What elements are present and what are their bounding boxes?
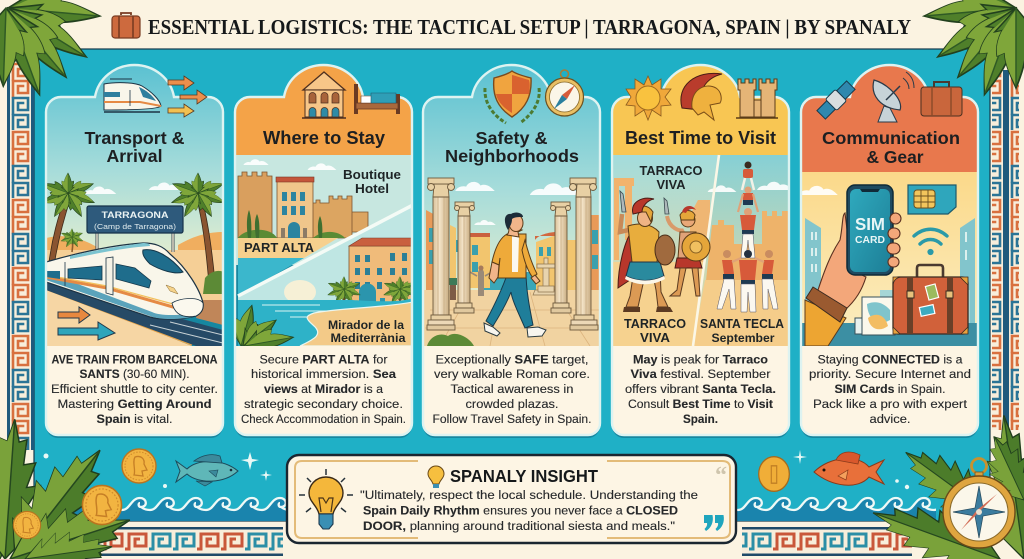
buildings left	[426, 210, 490, 290]
title text: ESSENTIAL LOGISTICS: THE TACTICAL SETUP | TARRAGONA, SPAIN | BY SPANALY	[148, 15, 911, 39]
text panel	[46, 346, 223, 436]
icon: coin right	[759, 457, 789, 491]
icon: coin corner	[13, 511, 41, 539]
bottom greek key border right	[742, 527, 912, 556]
body text: very walkable Roman core.	[434, 367, 590, 381]
label: tarraco viva bottom: VIVA	[640, 331, 670, 345]
palm leaves: bottom right corner	[860, 400, 1024, 559]
wave band right	[736, 495, 936, 521]
station sign: TARRAGONA	[102, 210, 169, 221]
text panel	[235, 346, 412, 436]
body text	[809, 352, 971, 426]
rail tracks	[46, 282, 223, 346]
wave band left	[66, 495, 288, 521]
body text: advice.	[870, 412, 910, 426]
left palm tree	[47, 172, 95, 261]
watch strap	[806, 287, 847, 322]
icon: coin middle left	[82, 485, 122, 525]
label: tarraco viva top: VIVA	[656, 178, 686, 192]
icon: train and arrows	[104, 76, 207, 117]
heading	[84, 128, 185, 166]
decorative sparkles and dots	[44, 450, 909, 489]
body text: SANTS (30-60 MIN).	[80, 367, 190, 381]
card outline	[235, 65, 412, 435]
ground left	[612, 262, 710, 346]
text panel	[801, 346, 978, 436]
clouds	[455, 182, 580, 225]
fingers	[887, 213, 901, 267]
sea	[238, 298, 413, 346]
body text: crowded plazas.	[466, 397, 558, 411]
phone	[847, 185, 893, 275]
castle and old town	[238, 172, 368, 238]
label: part alta band	[238, 238, 338, 258]
body text: offers vibrant Santa Tecla.	[625, 382, 776, 396]
diagonal divider	[238, 205, 413, 296]
quote text: "Ultimately, respect the local schedule. Understanding the	[360, 488, 698, 502]
body text: SIM Cards in Spain.	[834, 382, 946, 396]
teal central field	[34, 49, 990, 521]
bush	[427, 334, 474, 346]
card outline	[801, 65, 978, 435]
distant water	[484, 272, 536, 290]
panel: safety and neighborhoods	[423, 57, 600, 438]
body text: Tactical awareness in	[450, 382, 574, 396]
body text: Viva festival. September	[630, 367, 770, 381]
quote mark open: “	[715, 463, 727, 489]
heading: Transport &	[84, 128, 185, 148]
right palm tree	[171, 172, 222, 294]
beach	[300, 302, 413, 346]
scene background	[47, 66, 222, 250]
text panel	[423, 346, 600, 436]
label: santa tecla: September	[712, 331, 775, 345]
label: santa tecla	[700, 317, 784, 345]
title	[112, 13, 911, 39]
columns	[427, 178, 598, 330]
walking person	[484, 213, 546, 337]
station sign: (Camp de Tarragona)	[94, 222, 177, 231]
right clouds	[708, 182, 793, 192]
icon: light bulb	[299, 469, 353, 529]
inner decorative frame	[295, 461, 730, 538]
body text: Secure PART ALTA for	[260, 352, 388, 366]
palms by the hotel	[328, 276, 411, 302]
right greek key border	[992, 70, 1019, 430]
label: mirador: Mediterrània	[330, 333, 406, 345]
icon: shield and laurel	[485, 71, 539, 123]
label: boutique hotel	[344, 170, 400, 193]
platform	[46, 288, 192, 346]
hotel	[348, 238, 411, 302]
panel: transport and arrival	[39, 57, 227, 438]
body text: Follow Travel Safety in Spain.	[432, 412, 592, 426]
header band	[801, 57, 978, 172]
heading: Best Time to Visit	[625, 128, 776, 148]
body text: strategic secondary choice.	[244, 397, 403, 411]
card shadow	[801, 68, 978, 438]
body text: Pack like a pro with expert	[813, 397, 968, 411]
soldier two	[664, 198, 710, 296]
body text: May is peak for Tarraco	[633, 352, 768, 366]
floor	[801, 323, 978, 347]
icon: suitcase	[112, 13, 140, 38]
left greek key border	[7, 60, 34, 450]
body text: Mastering Getting Around	[58, 397, 212, 411]
label: tarraco viva bottom: TARRACO	[624, 317, 686, 331]
quote text: Spain Daily Rhythm ensures you never face a CLOSED	[363, 504, 678, 518]
palm leaves: bottom left corner	[0, 400, 160, 559]
sun glow	[284, 280, 316, 300]
buildings right	[535, 215, 599, 290]
card shadow	[612, 68, 789, 438]
card shadow	[46, 68, 223, 438]
fountain	[533, 258, 558, 295]
lower scene sky	[238, 230, 368, 300]
bottom greek key border left	[96, 527, 283, 556]
palm leaves: top right corner	[904, 0, 1024, 110]
heading	[822, 128, 960, 167]
panel: best time to visit	[612, 57, 793, 438]
label: santa tecla: SANTA TECLA	[700, 317, 784, 331]
icon: roman helmet	[681, 73, 722, 120]
map	[855, 297, 895, 335]
panel: communication and gear	[798, 57, 978, 438]
body text: Staying CONNECTED is a	[818, 352, 963, 366]
icon: orange fish	[814, 452, 884, 485]
quote text	[360, 488, 698, 533]
ground right	[693, 280, 789, 346]
label: tarraco viva top: TARRACO	[640, 164, 703, 178]
callout box	[287, 455, 736, 543]
header band	[612, 57, 789, 155]
label: part alta band: PART ALTA	[244, 241, 314, 255]
upper sea	[238, 258, 304, 296]
card outline	[46, 65, 223, 435]
distant tower left	[690, 200, 710, 270]
heading: Neighborhoods	[445, 146, 579, 166]
cloud	[798, 186, 838, 195]
label: tarraco viva bottom	[624, 317, 686, 345]
card outline	[423, 65, 600, 435]
body text	[241, 352, 406, 426]
icon: satellite dish	[873, 72, 914, 122]
clouds	[84, 183, 181, 194]
icon: suitcase	[921, 82, 962, 116]
station sign	[87, 206, 183, 252]
ruins left	[614, 178, 634, 260]
insight heading: SPANALY INSIGHT	[450, 466, 598, 486]
clouds	[243, 159, 336, 170]
body text: priority. Secure Internet and	[809, 367, 971, 381]
heading: Where to Stay	[263, 128, 385, 148]
heading: Communication	[822, 128, 960, 148]
heading: & Gear	[866, 147, 924, 167]
body text: historical immersion. Sea	[251, 367, 396, 381]
hills	[47, 232, 222, 250]
panel: where to stay	[229, 57, 418, 438]
card outline	[612, 65, 789, 435]
phone: CARD	[855, 234, 885, 246]
ruin walls right	[705, 211, 789, 290]
soldier one	[618, 191, 675, 312]
label: boutique hotel: Boutique	[343, 168, 401, 182]
text panel	[612, 346, 789, 436]
suitcase	[893, 265, 968, 334]
header band	[236, 66, 411, 155]
train	[46, 243, 203, 319]
icon: teal fish	[176, 455, 238, 486]
body text: AVE TRAIN FROM BARCELONA	[52, 352, 218, 366]
phone: SIM	[855, 214, 885, 234]
icon: compass large	[943, 458, 1015, 548]
body text: views at Mirador is a	[264, 382, 383, 396]
body text	[51, 352, 218, 426]
icon: sun	[626, 76, 671, 120]
icon: closing quote mark	[704, 515, 724, 531]
body text: Spain is vital.	[96, 412, 172, 426]
wifi icon	[914, 229, 947, 254]
human tower	[717, 162, 778, 312]
label: tarraco viva top	[640, 164, 703, 192]
icon: coin top	[122, 449, 156, 483]
body text: Consult Best Time to Visit	[628, 397, 773, 411]
icon: compass	[546, 70, 584, 116]
heading: Arrival	[106, 146, 162, 166]
body text: Spain.	[683, 412, 718, 426]
sim card	[908, 185, 956, 214]
card shadow	[235, 68, 412, 438]
heading	[445, 128, 579, 166]
diagonal divider	[693, 155, 719, 346]
left scene background	[612, 155, 719, 346]
scene sky	[423, 57, 600, 297]
label: mirador	[328, 320, 406, 342]
platform arrows	[58, 307, 115, 340]
label: boutique hotel: Hotel	[355, 182, 389, 196]
small palm	[60, 229, 84, 252]
upper scene sky	[235, 155, 412, 265]
hand and arm	[805, 213, 866, 346]
callout: spanaly insight	[287, 455, 736, 543]
body text: Efficient shuttle to city center.	[51, 382, 218, 396]
right scene background	[693, 155, 789, 346]
icon: castle towers	[736, 79, 778, 118]
body text	[625, 352, 776, 426]
distant walkers	[449, 266, 492, 300]
quote text: DOOR, planning around traditional siesta and meals."	[363, 519, 675, 533]
heading: Safety &	[476, 128, 548, 148]
icon: building and bed	[302, 72, 398, 118]
body text: Exceptionally SAFE target,	[436, 352, 588, 366]
icon: satellite	[815, 79, 857, 121]
plaza	[423, 290, 600, 347]
card shadow	[423, 68, 600, 438]
plant	[236, 304, 294, 346]
body text: Check Accommodation in Spain.	[241, 412, 406, 426]
palm leaves: top left corner	[0, 0, 120, 110]
body text	[432, 352, 592, 426]
city buildings	[805, 218, 975, 330]
label: mirador: Mirador de la	[328, 320, 405, 332]
scene background	[801, 172, 978, 347]
